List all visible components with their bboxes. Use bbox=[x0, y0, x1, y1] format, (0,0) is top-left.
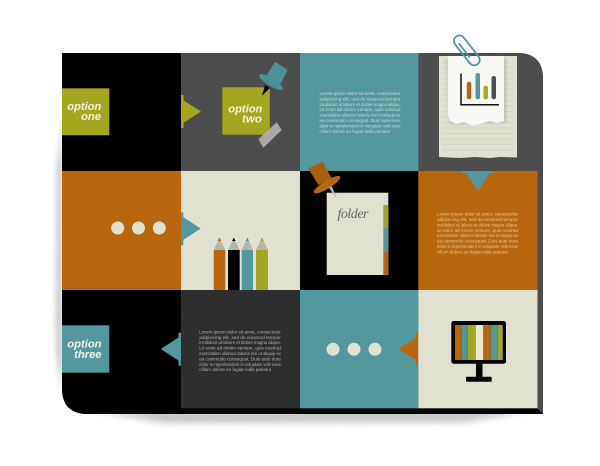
option three badge: option bbox=[67, 339, 102, 351]
text block: incididunt ut labore et dolore magna aliqua. bbox=[437, 222, 518, 228]
panel backing bbox=[62, 53, 543, 414]
text block: dolor in reprehenderit in voluptate velit esse bbox=[199, 362, 281, 368]
tape bbox=[258, 122, 282, 148]
text block: Ut enim ad minim veniam, quis nostrud bbox=[199, 346, 281, 352]
cell: black option one bbox=[62, 53, 181, 171]
arrow: olive right bbox=[181, 95, 201, 128]
text block: cillum dolore eu fugiat nulla pariatur bbox=[199, 367, 272, 373]
option three badge bbox=[62, 325, 109, 373]
right edge strip bbox=[418, 53, 543, 414]
icon: monitor bbox=[451, 321, 506, 382]
arrow: teal left bbox=[161, 333, 181, 366]
text block: adipisicing elit, sed do eiusmod tempor bbox=[437, 217, 518, 223]
text block: Ut enim ad minim veniam, quis nostrud bbox=[437, 228, 518, 234]
text block: ea commodo consequat. Duis aute irure bbox=[320, 118, 401, 124]
dots bbox=[326, 343, 382, 356]
text block: exercitation ullamco laboris nisi ut aliquip ex bbox=[320, 113, 401, 119]
icon: pencils bbox=[214, 238, 268, 290]
text block: ea commodo consequat. Duis aute irure bbox=[437, 239, 518, 245]
option one badge: option bbox=[67, 101, 101, 113]
text block bbox=[320, 91, 401, 135]
option two badge bbox=[222, 87, 270, 135]
cell: teal dots bbox=[300, 290, 418, 408]
icon: folder: folder bbox=[338, 207, 369, 222]
text block bbox=[199, 329, 281, 373]
cell: black folder bbox=[300, 162, 418, 290]
arrow: teal down bbox=[462, 171, 494, 191]
torn white sheet bbox=[448, 56, 504, 126]
text block bbox=[437, 212, 518, 255]
text block: adipisicing elit, sed do eiusmod tempor bbox=[199, 335, 281, 341]
panel shadow bbox=[56, 120, 530, 423]
text block: Lorem ipsum dolor sit amet, consectetur bbox=[320, 91, 401, 97]
torn sheet shadow bbox=[446, 58, 506, 124]
icon: orange push pin bbox=[308, 162, 342, 199]
option one badge bbox=[62, 88, 109, 135]
cell: dark text bbox=[181, 290, 300, 408]
text block: cillum dolore eu fugiat nulla pariatur bbox=[320, 129, 391, 135]
option two badge: two bbox=[242, 113, 262, 125]
text block: incididunt ut labore et dolore magna aliqua. bbox=[199, 340, 281, 346]
text block: ea commodo consequat. Duis aute irure bbox=[199, 356, 281, 362]
option one badge: one bbox=[81, 111, 101, 123]
text block: dolor in reprehenderit in voluptate velit esse bbox=[437, 244, 518, 250]
text block: dolor in reprehenderit in voluptate velit esse bbox=[320, 123, 401, 129]
lined sheet bbox=[439, 56, 517, 158]
dots bbox=[111, 222, 166, 234]
text block: exercitation ullamco laboris nisi ut aliquip ex bbox=[199, 351, 281, 357]
text block: cillum dolore eu fugiat nulla pariatur bbox=[437, 249, 508, 255]
cell: orange text bbox=[418, 171, 538, 290]
icon: note paper with chart bbox=[439, 33, 517, 158]
cell: black option three bbox=[62, 290, 181, 414]
icon: paperclip bbox=[452, 33, 482, 68]
icon: teal push pin bbox=[257, 62, 288, 96]
arrow: orange left bbox=[398, 333, 418, 366]
cell: orange dots bbox=[62, 171, 181, 290]
cell: gray option two bbox=[181, 53, 300, 171]
bar chart bbox=[461, 73, 499, 105]
text block: Ut enim ad minim veniam, quis nostrud bbox=[320, 107, 401, 113]
arrow: teal right bbox=[181, 212, 201, 245]
text block: incididunt ut labore et dolore magna aliqua. bbox=[320, 102, 400, 108]
option two badge: option bbox=[228, 104, 262, 116]
text block: adipisicing elit, sed do eiusmod tempor bbox=[320, 96, 401, 102]
cell: cream monitor bbox=[418, 290, 538, 408]
text block: Lorem ipsum dolor sit amet, consectetur bbox=[199, 329, 281, 335]
text block: exercitation ullamco laboris nisi ut aliquip ex bbox=[437, 233, 518, 239]
cell: teal text bbox=[300, 53, 418, 171]
text block: Lorem ipsum dolor sit amet, consectetur bbox=[437, 212, 518, 218]
option three badge: three bbox=[74, 349, 102, 361]
cell: cream pencils bbox=[181, 171, 300, 290]
